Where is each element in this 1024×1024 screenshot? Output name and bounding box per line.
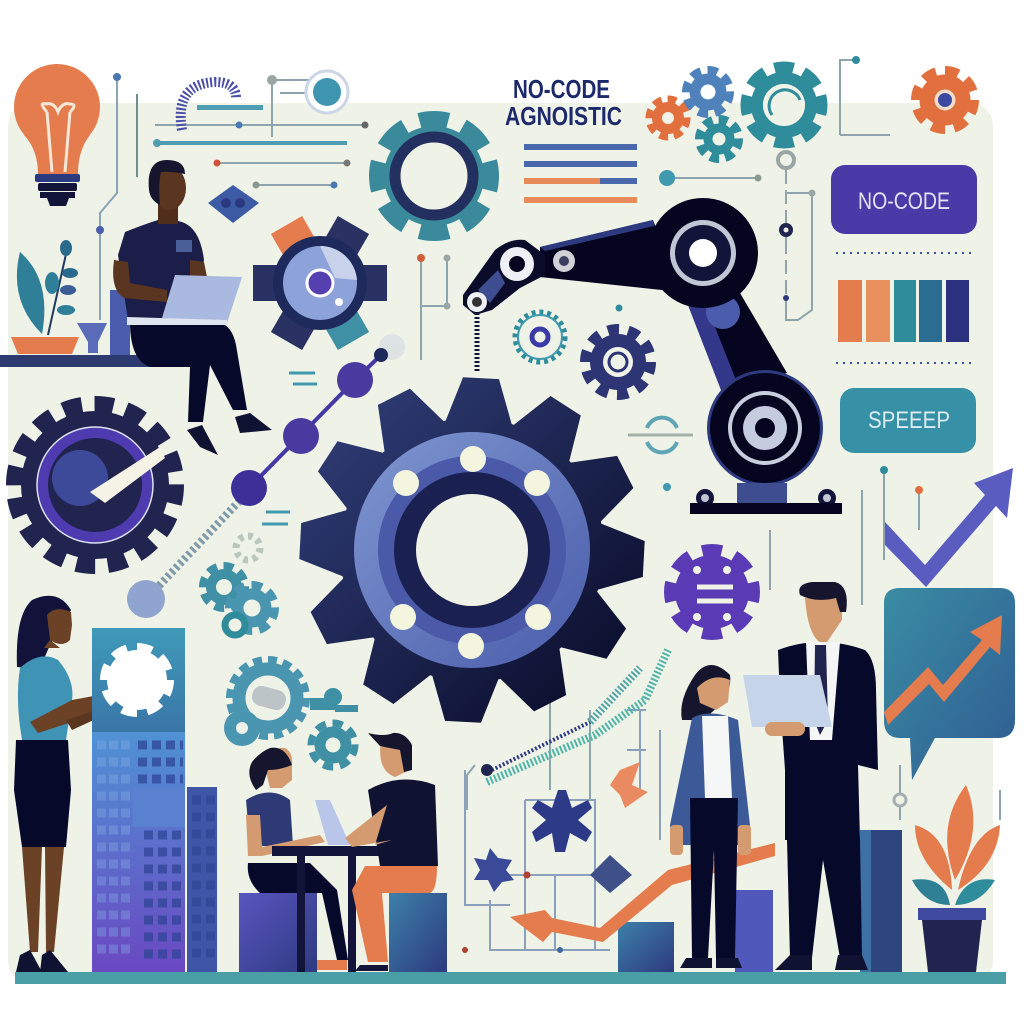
text lines bars <box>524 144 637 203</box>
button: no-code <box>831 165 977 234</box>
bottom teal strip <box>15 972 1006 984</box>
robot arm <box>463 198 842 514</box>
plant: top left <box>11 240 79 354</box>
gear: upper center teal <box>379 121 489 231</box>
icon: small diamond <box>208 185 259 223</box>
small nodes <box>659 152 794 237</box>
gear: top right orange <box>917 72 973 128</box>
icon: top arc gauge <box>181 71 348 130</box>
circuit lines and nodes <box>96 56 1000 953</box>
bottom growth arrow <box>510 830 902 972</box>
heading: no-code agnostic <box>505 74 622 131</box>
gears: bottom center teal <box>224 660 358 767</box>
scene: two people at table <box>239 733 447 972</box>
heading: no-code agnostic: AGNOISTIC <box>505 101 622 131</box>
speech bubble with chart <box>884 588 1015 780</box>
gear: purple menu <box>673 553 751 631</box>
button: speed: SPEEEP <box>868 407 950 434</box>
building with white gear <box>92 628 217 972</box>
icon: light bulb <box>14 64 100 206</box>
gear: dark with lens <box>253 216 387 350</box>
person: woman left <box>14 596 122 972</box>
small gears center-left <box>203 536 275 635</box>
heading: no-code agnostic: NO-CODE <box>513 74 610 104</box>
shelf <box>0 355 190 367</box>
growth arrow <box>885 468 1013 587</box>
gear: left with needle <box>15 405 175 565</box>
gears under robot arm <box>515 304 650 394</box>
dotted lines <box>836 253 975 363</box>
button: no-code: NO-CODE <box>858 188 950 215</box>
chain of nodes <box>127 334 405 618</box>
person: businesswoman <box>670 665 751 968</box>
button: speed <box>840 388 976 453</box>
plant: bottom right <box>912 785 1000 972</box>
scribble chains center <box>481 650 668 782</box>
central gear <box>299 377 645 723</box>
icon: goblet vase <box>77 323 107 353</box>
small orange arrow icon <box>610 762 648 808</box>
top gear cluster <box>650 69 820 158</box>
snowflake gear icons <box>474 790 632 893</box>
icon: small rotation arrows <box>628 418 693 491</box>
colour bars <box>838 280 969 342</box>
person: man with laptop <box>110 160 272 455</box>
person: businessman with tablet <box>743 582 878 970</box>
